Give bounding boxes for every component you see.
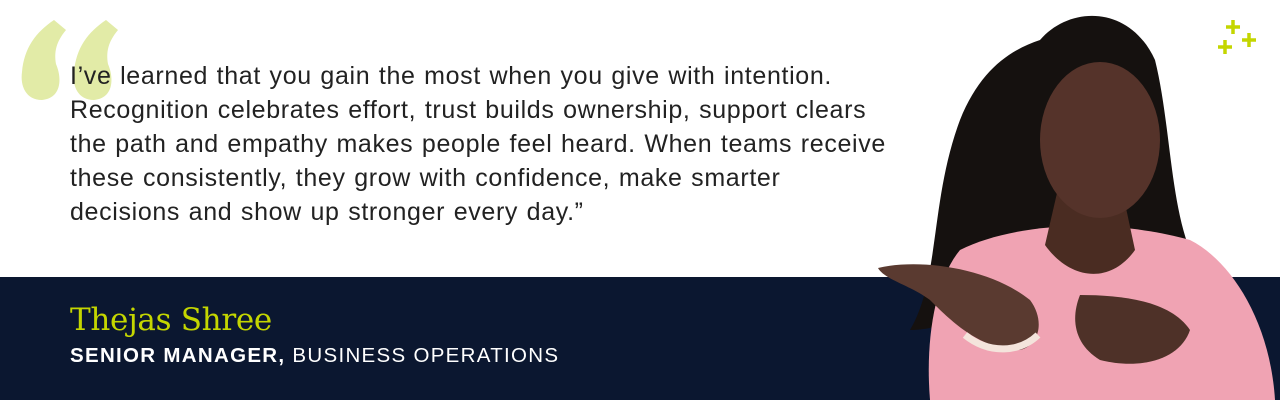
hair (910, 16, 1190, 330)
hand outstretched (878, 264, 1039, 350)
role: SENIOR MANAGER, BUSINESS OPERATIONS (70, 344, 559, 367)
hand on chest (1075, 295, 1190, 364)
quote text: Recognition celebrates effort, trust builds ownership, support clears (70, 96, 866, 124)
quote text: the path and empathy makes people feel heard. When teams receive (70, 130, 886, 158)
icon: plus signs (1218, 20, 1256, 54)
quote text: these consistently, they grow with confidence, make smarter (70, 164, 780, 192)
quote text: decisions and show up stronger every day.” (70, 198, 584, 226)
quote text (70, 62, 886, 226)
navy band (0, 277, 1280, 400)
neck & face (1040, 62, 1160, 274)
name: Thejas Shree (70, 302, 272, 338)
quote text: I’ve learned that you gain the most when you give with intention. (70, 62, 832, 90)
photo: person (878, 16, 1275, 400)
pink top (929, 226, 1275, 400)
icon: quote marks (22, 20, 118, 100)
